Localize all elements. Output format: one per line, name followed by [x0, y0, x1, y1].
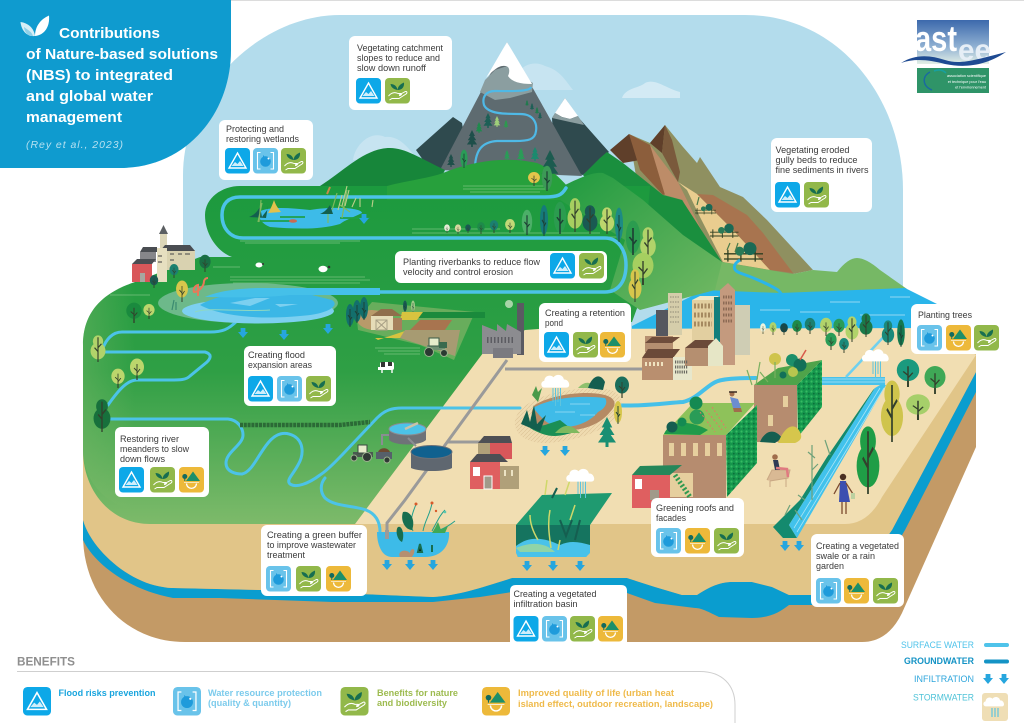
- callout: vegetated swale: Creating a vegetated: [816, 541, 899, 552]
- cow: [378, 362, 394, 373]
- sky: [183, 15, 903, 335]
- benefits frame: [17, 672, 735, 723]
- callout: vegetating eroded gully beds: gully beds to reduce: [776, 155, 858, 166]
- callout: protecting and restoring wetlands: Protecting and: [226, 124, 284, 135]
- benefit: nature: Benefits for nature: [377, 688, 458, 699]
- trees: mountain: [447, 100, 558, 191]
- farm fields: [357, 302, 485, 360]
- soil: [83, 350, 976, 597]
- callout: restoring river meanders: Restoring river: [120, 434, 179, 445]
- callout: vegetating eroded gully beds: [771, 138, 872, 212]
- flood lake: [158, 283, 380, 324]
- swale plants: [785, 440, 830, 520]
- benefits heading: BENEFITS: [17, 656, 75, 668]
- tractor (trailer): [351, 445, 392, 463]
- title panel: [0, 0, 231, 168]
- gully stream: [734, 260, 782, 299]
- callout: restoring river meanders: meanders to slow: [120, 444, 189, 455]
- logo: astee: ast: [915, 18, 957, 59]
- pond rain cloud: [541, 375, 569, 406]
- buffer infiltration arrows: [382, 560, 438, 570]
- callout: vegetating eroded gully beds: Vegetating eroded: [776, 145, 850, 156]
- callout: greening roofs and facades: facades: [656, 513, 686, 524]
- right light hills: [640, 258, 907, 300]
- mountains: [416, 42, 609, 176]
- heron: [194, 278, 208, 296]
- green buffer pond: [377, 502, 455, 557]
- roads: [387, 360, 642, 537]
- benefit: quality of life: Improved quality of life (urban heat: [518, 688, 675, 699]
- trees: hillside row: [444, 198, 656, 302]
- substrate: bedrock: [83, 360, 976, 642]
- title text: [26, 25, 218, 126]
- callout: planting riverbanks: velocity and control erosion: [403, 267, 513, 278]
- title text: Contributions: [59, 25, 160, 42]
- main green land: [83, 186, 650, 524]
- green building back: [747, 350, 822, 443]
- trees: city row: [760, 313, 946, 494]
- factory: [482, 300, 524, 358]
- top rule: [231, 0, 1024, 1]
- sheep: [256, 262, 330, 272]
- farm poplars: [346, 297, 415, 327]
- benefit: nature: and biodiversity: [377, 698, 448, 709]
- callout: green buffer: [261, 525, 367, 596]
- logo: astee: et technique pour l'eau: [948, 80, 986, 84]
- city houses: [642, 336, 723, 380]
- callout: flood expansion areas: [244, 346, 336, 406]
- callout: vegetating eroded gully beds: fine sediments in rivers: [776, 165, 869, 176]
- callout: planting riverbanks: [395, 251, 607, 283]
- callout: planting trees: [911, 304, 1005, 354]
- wetland infiltration arrow: [359, 214, 369, 224]
- callout: planting trees: Planting trees: [918, 310, 972, 321]
- field stripes: [110, 186, 620, 354]
- tractor (field): [424, 338, 448, 356]
- dark ridge: [583, 152, 722, 262]
- callout: protecting and restoring wetlands: restoring wetlands: [226, 134, 299, 145]
- callout: restoring river meanders: [115, 427, 209, 497]
- callout: flood expansion areas: Creating flood: [248, 350, 305, 361]
- callout: vegetated infiltration basin: Creating a vegetated: [514, 589, 596, 600]
- callout: vegetated infiltration basin: [510, 585, 627, 642]
- benefit: quality of life: [482, 687, 713, 716]
- red houses: [470, 436, 519, 489]
- river: to green buffer: [321, 478, 380, 542]
- callout: flood expansion areas: expansion areas: [248, 360, 312, 371]
- callout: retention pond: [539, 303, 631, 362]
- legend: infiltration: [914, 674, 1009, 685]
- benefit: water resource: [173, 687, 322, 716]
- logo: astee: et l'environnement: [955, 86, 987, 90]
- green building front: [663, 396, 757, 498]
- callout: retention pond: Creating a retention: [545, 308, 625, 319]
- legend: groundwater: GROUNDWATER: [904, 656, 974, 667]
- callout: restoring river meanders: down flows: [120, 454, 165, 465]
- clouds: [353, 63, 680, 160]
- left edge light: [83, 282, 135, 510]
- retention pond: [515, 376, 621, 443]
- callout: retention pond: pond: [545, 318, 563, 329]
- benefit: flood risks: Flood risks prevention: [58, 688, 156, 699]
- trees: village and left: [91, 255, 211, 432]
- urban ground: [355, 328, 976, 524]
- callout: vegetated swale: swale or a rain: [816, 551, 875, 562]
- legend: infiltration: INFILTRATION: [914, 674, 974, 685]
- urban lake: [632, 288, 937, 330]
- title text: management: [26, 109, 122, 126]
- basin rain cloud: [566, 469, 594, 498]
- logo: astee: association scientifique: [947, 74, 986, 78]
- benefit: nature: [340, 687, 458, 716]
- river: meanders: [103, 320, 520, 486]
- gardener: [729, 392, 742, 412]
- infiltration basin: [516, 480, 612, 557]
- logo: astee: ee: [958, 34, 991, 67]
- river: wetland loop: [222, 188, 626, 292]
- callout: vegetated infiltration basin: infiltration basin: [514, 599, 578, 610]
- title leaf icon: [20, 16, 49, 36]
- swale infiltration arrows: [780, 541, 804, 551]
- basin infiltration arrows: [522, 561, 585, 571]
- benefit: water resource: Water resource protection: [208, 688, 322, 699]
- walking woman: [834, 474, 855, 514]
- gully fences: [695, 197, 763, 262]
- foreground hills: [387, 160, 722, 310]
- wetland reeds right: [338, 186, 373, 210]
- callout: vegetating catchment slopes: [349, 36, 452, 110]
- callout: vegetated swale: [811, 534, 904, 607]
- callout: green buffer: Creating a green buffer: [267, 530, 362, 541]
- callout: planting riverbanks: Planting riverbanks to reduce flow: [403, 257, 540, 268]
- title text: of Nature-based solutions: [26, 46, 218, 63]
- mountain river: [475, 87, 536, 166]
- pond trees: [598, 376, 629, 447]
- back hill: [320, 148, 445, 200]
- river: through city: [607, 378, 756, 406]
- callout: greening roofs and facades: Greening roofs and: [656, 503, 734, 514]
- callout: vegetating catchment slopes: Vegetating catchment: [357, 43, 443, 54]
- brown mountains: [610, 125, 813, 274]
- callout: vegetating catchment slopes: slow down runoff: [357, 63, 426, 74]
- legend: surface water: SURFACE WATER: [901, 640, 974, 651]
- wetland pond: [249, 187, 370, 229]
- title text: and global water: [26, 88, 153, 105]
- pond infiltration arrows: [540, 446, 570, 456]
- citation: (Rey et al., 2023): [26, 139, 123, 151]
- callout: protecting and restoring wetlands: [219, 120, 313, 180]
- callout: green buffer: treatment: [267, 550, 305, 561]
- callout: green buffer: to improve wastewater: [267, 540, 356, 551]
- logo: astee: [901, 18, 1006, 93]
- title text: (NBS) to integrated: [26, 67, 173, 84]
- rivers: [103, 188, 756, 542]
- wastewater tanks: [382, 423, 452, 471]
- flood infiltration arrows: [238, 324, 333, 340]
- callout: vegetated swale: garden: [816, 561, 844, 572]
- benefit: flood risks: [23, 687, 156, 716]
- canal and swale: [773, 330, 890, 538]
- benefit: quality of life: island effect, outdoor recreation, landscape): [518, 699, 713, 710]
- city towers: [656, 283, 750, 365]
- groundwater: [83, 372, 976, 618]
- small red house: [632, 465, 693, 508]
- hedge: [240, 422, 370, 425]
- canal rain cloud: [862, 349, 889, 378]
- callout: vegetating catchment slopes: slopes to reduce and: [357, 53, 440, 64]
- legend: stormwater: STORMWATER: [913, 692, 974, 704]
- seated person: [767, 454, 790, 487]
- lake ripples: [760, 297, 910, 315]
- benefit: water resource: (quality & quantity): [208, 698, 291, 709]
- village: [132, 225, 195, 282]
- legend: stormwater: [913, 692, 1008, 721]
- callout: greening roofs and facades: [651, 498, 744, 557]
